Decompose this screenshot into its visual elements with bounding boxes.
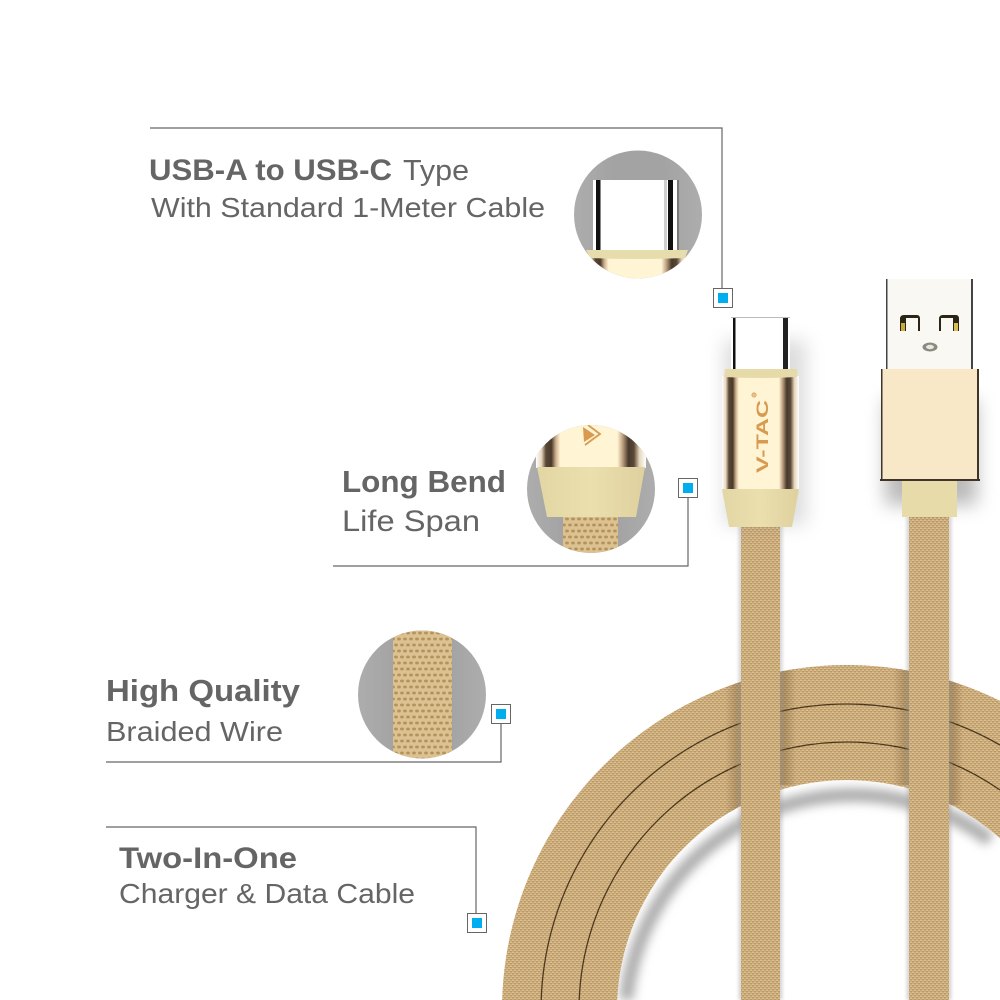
registered mark [752, 393, 756, 397]
leader line: braid [106, 704, 510, 762]
text: USB-A to USB-C: USB-A to USB-C [149, 154, 392, 187]
text: Long Bend: Long Bend [342, 464, 506, 499]
marker [492, 704, 510, 724]
right contact hole [939, 315, 959, 331]
detail circle: bend relief [527, 425, 655, 555]
coil body [502, 665, 1000, 1000]
USB-C cable strand [738, 520, 782, 1000]
leader line: connector [150, 128, 732, 308]
plug shadow [724, 340, 806, 525]
text: High Quality [106, 673, 301, 747]
USB-C metal tip [731, 317, 790, 370]
marker [468, 914, 486, 932]
USB-A gold housing [881, 369, 979, 480]
leader line: two-in-one [106, 827, 486, 932]
USB-A neck [902, 481, 957, 517]
lower collar [722, 489, 799, 527]
detail circle: braid [358, 630, 486, 760]
USB-C plug [722, 317, 806, 527]
text: Two-In-One: Charger & Data Cable [119, 878, 415, 909]
text: USB-A to USB-C: Type [403, 155, 469, 187]
coil shadow [626, 795, 990, 1000]
detail circle: USB-C tip [574, 150, 702, 280]
USB-A metal shell [886, 279, 973, 370]
V-TAC logo: V-TAC [753, 400, 772, 473]
upper collar [724, 369, 797, 378]
plug shadow [885, 400, 977, 505]
marker [714, 288, 732, 308]
USB-C metal housing [722, 376, 799, 490]
text: High Quality: High Quality [106, 673, 301, 708]
text: High Quality: Braided Wire [106, 716, 283, 747]
left contact hole [900, 315, 920, 331]
USB-A plug [880, 279, 980, 517]
shell dimple [922, 342, 938, 352]
text: USB-A to USB-C: With Standard 1-Meter Cable [151, 192, 545, 223]
leader line: bend [333, 478, 698, 566]
text: USB-A to USB-C [149, 154, 545, 223]
USB-A cable strand [906, 512, 952, 1000]
text: Two-In-One: Two-In-One [119, 842, 297, 875]
marker [678, 478, 698, 498]
text: Two-In-One [119, 842, 415, 909]
text: Long Bend [342, 464, 506, 538]
coiled braided cable [502, 660, 1000, 1000]
text: Long Bend: Life Span [342, 505, 480, 538]
logo arrow [583, 425, 600, 445]
